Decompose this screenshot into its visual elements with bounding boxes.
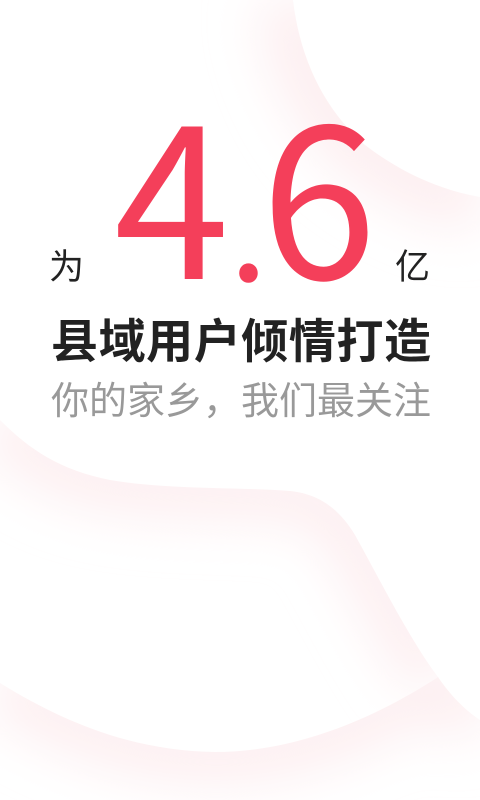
heading: 县域用户倾情打造 [51,315,431,368]
big number 4.6: 6 [261,38,376,339]
background wave: top right [293,0,480,197]
suffix 亿: 亿 [395,248,430,287]
big number 4.6: . [229,120,268,322]
prefix 为: 为 [49,248,84,287]
background wave: middle [0,420,438,677]
background wave: bottom [5,682,473,782]
big number 4.6: 4 [114,38,229,339]
subheading: 你的家乡，我们最关注 [51,381,431,423]
big number 4.6 [114,38,376,339]
